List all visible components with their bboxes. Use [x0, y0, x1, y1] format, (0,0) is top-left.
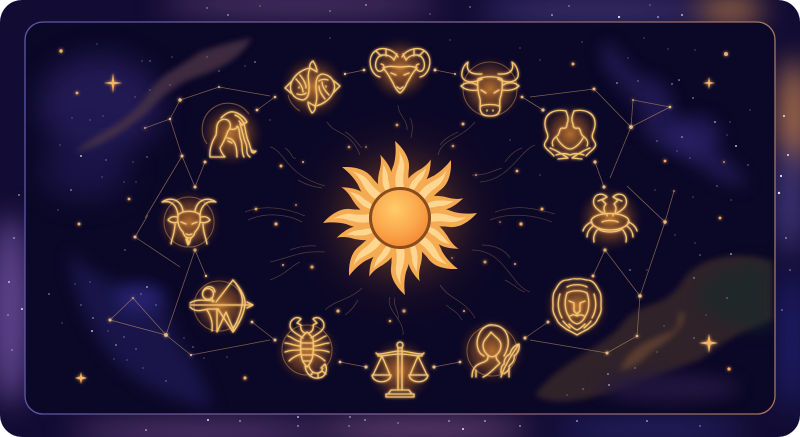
fish lower — [308, 74, 340, 113]
icon: scorpio — [274, 318, 340, 384]
sky stars — [48, 38, 751, 396]
icon: taurus — [457, 56, 523, 122]
icon: aquarius — [198, 101, 264, 167]
icon: virgo — [458, 317, 526, 385]
nebula: bottom right — [535, 256, 772, 402]
nebula: top left — [38, 38, 252, 200]
icon: libra — [367, 338, 433, 404]
sun glow — [288, 106, 512, 330]
constellation lines — [108, 68, 675, 369]
icon: cancer — [577, 186, 643, 252]
nebula: top right — [601, 40, 748, 186]
nebula: bottom left — [70, 250, 215, 410]
bright stars — [59, 49, 731, 380]
icon: leo — [543, 272, 611, 340]
icon: aries — [367, 36, 433, 102]
short rays — [335, 153, 465, 283]
fish upper — [285, 61, 317, 100]
icon: four-point stars — [75, 73, 718, 384]
icon: pisces — [280, 54, 346, 120]
icon: capricorn — [156, 189, 222, 255]
icon: sun — [323, 141, 477, 295]
constellation nodes — [108, 68, 675, 369]
wavy energy lines — [245, 105, 555, 335]
long rays — [323, 141, 477, 295]
sun disc — [370, 188, 430, 248]
icon: sagittarius — [189, 274, 253, 338]
icon: gemini — [539, 103, 601, 165]
